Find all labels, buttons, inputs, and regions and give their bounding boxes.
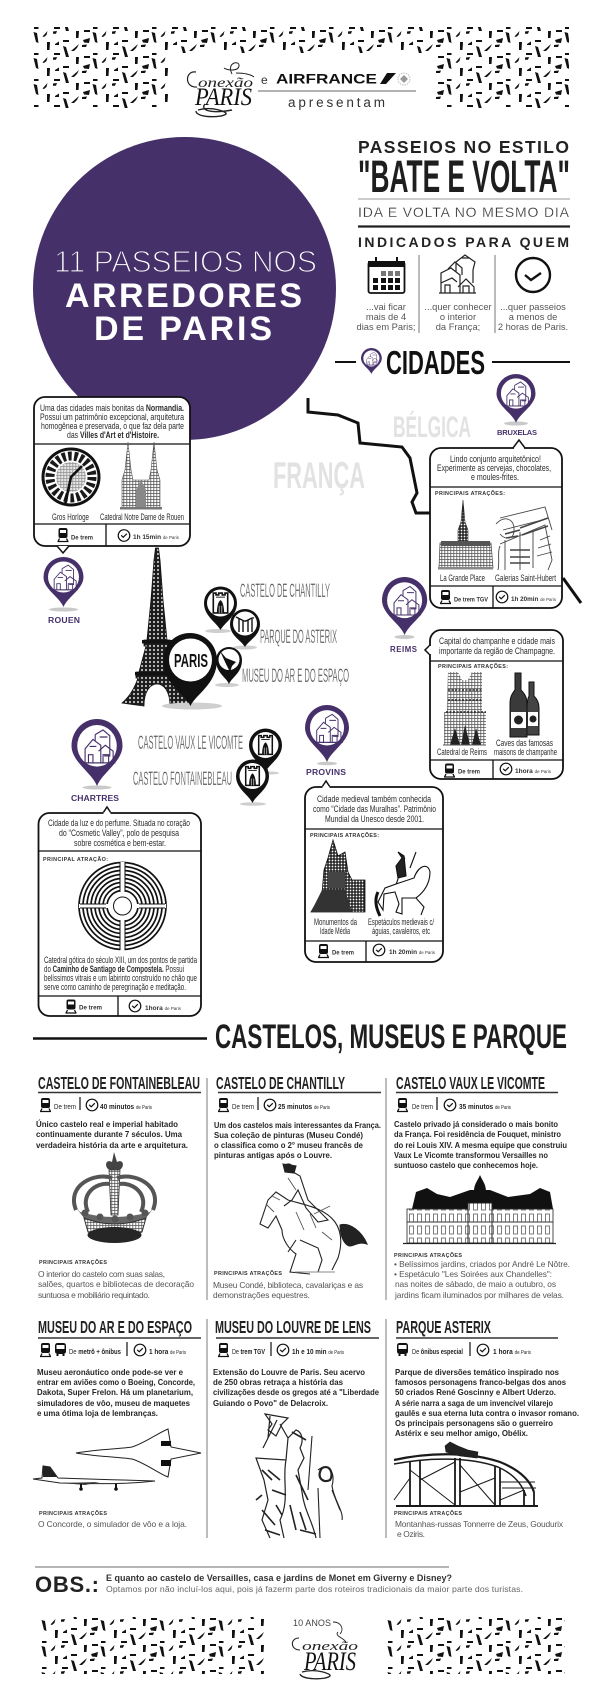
Chartres attraction text: belíssimos vitrais e um labirinto construído no chão que xyxy=(44,973,197,983)
attractions: e Oziris. xyxy=(397,1529,425,1539)
attractions: PRINCIPAIS ATRAÇÕES xyxy=(39,1259,107,1266)
attractions: demonstrações equestres. xyxy=(213,1290,310,1300)
description: Guiando o Povo" de Delacroix. xyxy=(213,1398,328,1408)
Rouen description: Possui um patrimônio excepcional, arquitetura xyxy=(40,412,184,422)
meta row: 1h e 10 min de Paris xyxy=(292,1347,344,1356)
duration xyxy=(118,530,180,541)
attractions xyxy=(213,1270,363,1300)
duration: 1hora de Paris xyxy=(515,768,552,775)
description: Os principais personagens são o guerreiro xyxy=(395,1418,553,1428)
meta row: De metrô + ônibus xyxy=(69,1347,121,1356)
attractions: jardins ficam iluminados por milhares de velas. xyxy=(394,1290,564,1300)
description: Museu aeronáutico onde pode-se ver e xyxy=(37,1367,183,1377)
logo: 10 anos Conexão Paris xyxy=(292,1618,359,1679)
attractions: Museu Condé, biblioteca, cavalariças e as xyxy=(213,1280,363,1290)
text: who is it for xyxy=(357,255,568,333)
meta row: 35 minutos de Paris xyxy=(459,1102,511,1111)
pin: Air museum xyxy=(216,647,242,684)
note: OBS: E quanto ao castelo de Versailles, casa e jardins de Monet em Giverny e Disney? xyxy=(106,1573,452,1583)
Reims description: importante da região de Champagne. xyxy=(439,646,555,656)
description: Astérix e seu melhor amigo, Obélix. xyxy=(395,1428,528,1438)
map label: Bélgica: BÉLGICA xyxy=(393,410,471,444)
description: famosos personagens franco-belgas dos anos xyxy=(395,1377,566,1387)
card: Museu do Ar e do Espaço xyxy=(33,1317,201,1529)
duration xyxy=(373,944,436,956)
description: simuladores de vôo, museu de maquetes xyxy=(37,1398,190,1408)
attractions: PRINCIPAIS ATRAÇÕES xyxy=(394,1252,462,1259)
illustration: Liberty Leading the People xyxy=(256,1414,342,1538)
transport: train xyxy=(444,764,480,777)
meta row: De trem xyxy=(54,1102,76,1111)
meta row xyxy=(40,1097,152,1112)
description xyxy=(36,1118,188,1150)
Provins description: como “Cidade das Muralhas”. Patrimônio xyxy=(313,804,436,814)
pin: Asterix xyxy=(230,609,260,647)
attractions: Montanhas-russas Tonnerre de Zeus, Goudurix xyxy=(395,1519,564,1529)
description xyxy=(394,1119,567,1170)
meta row xyxy=(397,1097,511,1112)
Chartres description: sobre cosmética e bem-estar. xyxy=(74,838,166,848)
panel: Provins: águias, cavaleiros, etc xyxy=(372,926,430,936)
description: da França. Foi residência de Fouquet, ministro xyxy=(394,1129,561,1139)
panel: Rouen: Gros Horloge xyxy=(52,512,89,522)
duration: 1h 20min de Paris xyxy=(511,596,557,603)
Chartres description: Cidade da luz e do perfume. Situada no coração xyxy=(48,818,190,828)
map: border line xyxy=(308,398,581,603)
text: who is it for: da França; xyxy=(436,322,480,332)
Chartres attraction text: Catedral gótica do século XIII, um dos pontos de partida xyxy=(44,955,197,965)
illustration: horse and rider xyxy=(260,1164,367,1274)
panel: Provins: Espetáculos medievais c/ xyxy=(368,917,434,927)
panel: Reims xyxy=(425,630,563,779)
panel: Bruxelas: La Grande Place xyxy=(440,573,485,583)
description: verdadeira história da arte e arquitetura. xyxy=(36,1140,188,1150)
text: MUSEU DO AR E DO ESPAÇO xyxy=(242,666,349,687)
duration xyxy=(496,591,557,603)
meta row: 25 minutos de Paris xyxy=(278,1102,330,1111)
Bruxelas description: e moules-frites. xyxy=(471,472,519,482)
transport: train: De trem xyxy=(458,768,480,776)
meta row: 1 hora de Paris xyxy=(149,1347,186,1356)
card: Parque Asterix: PARQUE ASTERIX xyxy=(396,1317,491,1337)
description: suntuoso castelo que conhecemos hoje. xyxy=(394,1160,538,1170)
duration: 1hora de Paris xyxy=(145,1005,182,1012)
description xyxy=(37,1367,195,1418)
panel: Chartres xyxy=(38,807,201,1016)
description: Vaux Le Vicomte transformou Versailles no xyxy=(394,1150,548,1160)
title line 2: ARREDORES xyxy=(65,277,302,315)
illustration: knight on horse xyxy=(376,852,430,916)
card: Castelo de Chantilly xyxy=(213,1073,381,1300)
text: who is it for: 2 horas de Paris. xyxy=(498,322,568,332)
attractions xyxy=(394,1252,570,1300)
panel: Bruxelas: PRINCIPAIS ATRAÇÕES: xyxy=(435,490,505,497)
transport: train xyxy=(318,944,354,958)
text: who is it for: o interior xyxy=(440,312,476,322)
description: Um dos castelos mais interessantes da França. xyxy=(214,1120,381,1130)
text: CASTELO VAUX LE VICOMTE xyxy=(138,733,243,754)
panel: Provins: Idade Média xyxy=(320,926,350,936)
meta row xyxy=(218,1342,344,1356)
text: who is it for: ...vai ficar xyxy=(366,302,406,312)
logo: 10 anos Conexão Paris: onexão xyxy=(302,1638,359,1653)
meta row: De ônibus especial xyxy=(412,1347,463,1356)
duration: 1h 20min de Paris xyxy=(389,949,436,956)
title line 1: 11 PASSEIOS NOS xyxy=(54,244,317,279)
transport: train xyxy=(58,528,93,542)
purple circle title xyxy=(33,137,336,440)
attractions: O Concorde, o simulador de vôo e a loja. xyxy=(38,1519,187,1529)
description: Parque de diversões temático inspirado nos xyxy=(395,1367,559,1377)
panel: Rouen: Catedral Notre Dame de Rouen xyxy=(100,512,184,522)
transport: train: De trem xyxy=(79,1004,102,1012)
text: CASTELO FONTAINEBLEAU xyxy=(133,769,232,790)
Chartres description xyxy=(48,818,190,848)
illustration: labyrinth xyxy=(79,862,166,951)
pin: Rouen xyxy=(44,557,84,625)
description: Sua coleção de pinturas (Museu Condé) xyxy=(214,1130,363,1140)
description: o classifica como o 2° museu francês de xyxy=(214,1140,363,1150)
meta row: 1 hora de Paris xyxy=(493,1347,531,1356)
illustration: Reims cathedral xyxy=(443,672,486,745)
panel: Provins xyxy=(305,781,443,962)
icon: village houses xyxy=(439,255,476,293)
map label: França: FRANÇA xyxy=(273,455,365,496)
panel: Reims: Caves das famosas xyxy=(496,738,553,748)
attractions xyxy=(394,1510,564,1539)
panel: Bruxelas: Galerias Saint-Hubert xyxy=(495,573,556,583)
heading: bate e volta: PASSEIOS NO ESTILO xyxy=(358,137,569,157)
panel: Reims: Catedral de Reims xyxy=(437,747,487,757)
pin: Reims: REIMS xyxy=(390,645,417,654)
heading: bate e volta xyxy=(358,137,570,250)
attractions: suntuosa e mobiliário requintado. xyxy=(38,1290,150,1300)
description: gaulês e sua eterna luta contra o invasor romano. xyxy=(395,1408,579,1418)
pin: Rouen: ROUEN xyxy=(48,615,80,625)
column dividers xyxy=(207,1078,386,1538)
description xyxy=(213,1367,379,1408)
duration: 1h 15min de Paris xyxy=(133,534,180,541)
illustration: champagne bottles xyxy=(510,673,539,737)
text: who is it for: ...quer passeios xyxy=(500,302,566,312)
meta row: De trem TGV xyxy=(232,1347,265,1356)
transport: train xyxy=(66,1000,102,1013)
text: PARQUE DO ASTERIX xyxy=(260,627,337,648)
Rouen description xyxy=(40,403,184,440)
Bruxelas description: Lindo conjunto arquitetônico! xyxy=(450,454,541,464)
transport: train: De trem xyxy=(71,534,93,542)
duration xyxy=(500,763,552,775)
Reims description: Capital do champanhe e cidade mais xyxy=(439,636,555,646)
attractions: nas noites de sábado, de maio a outubro, os xyxy=(395,1279,556,1289)
card: Museu do Louvre de Lens xyxy=(213,1317,379,1538)
Chartres attraction text: serve como caminho de peregrinação e meditação. xyxy=(44,982,186,992)
illustration: Rouen cathedral xyxy=(120,442,162,510)
text: apresentam: apresentam xyxy=(288,95,385,110)
text: who is it for: a menos de xyxy=(509,312,557,322)
pin: Chartres xyxy=(71,719,122,803)
attractions xyxy=(38,1259,194,1300)
meta row: De trem xyxy=(232,1102,254,1111)
pin: Bruxelas: BRUXELAS xyxy=(497,428,537,437)
attractions: • Espetáculo "Les Soirées aux Chandelles": xyxy=(394,1269,552,1279)
pin: Provins: PROVINS xyxy=(306,767,346,777)
Rouen description: homogênea e preservada, o que faz dela parte xyxy=(41,421,184,431)
meta row xyxy=(397,1342,531,1356)
pin: Provins xyxy=(305,705,349,777)
note: OBS xyxy=(35,1567,523,1597)
description: pinturas antigas após o Louvre. xyxy=(214,1150,332,1160)
description: Dakota, Super Frelon. Há um planetarium, xyxy=(37,1387,193,1397)
attractions: • Belíssimos jardins, criados por André Le Nôtre. xyxy=(394,1259,570,1269)
pin: Vaux le Vicomte xyxy=(249,728,282,774)
heading: cidades: CIDADES xyxy=(386,344,485,381)
attractions: PRINCIPAIS ATRAÇÕES xyxy=(394,1510,462,1517)
pin: Paris: PARIS xyxy=(174,651,208,671)
pin: Chartres: CHARTRES xyxy=(71,793,119,803)
meta row: 40 minutos de Paris xyxy=(100,1102,152,1111)
logo: Conexão Paris: onexão xyxy=(198,76,253,91)
text: who is it for: mais de 4 xyxy=(366,312,406,322)
panel: Rouen xyxy=(34,397,190,553)
attractions: PRINCIPAIS ATRAÇÕES xyxy=(39,1510,107,1517)
description: 50 criados René Goscinny e Albert Uderzo. xyxy=(395,1387,556,1397)
description xyxy=(395,1367,579,1438)
description: entrar em aviões como o Boeing, Concorde, xyxy=(37,1377,195,1387)
description: civilizações desde os gregos até a "Liberdade xyxy=(213,1387,379,1397)
meta row: De trem xyxy=(412,1102,433,1111)
Bruxelas description: Experimente as cervejas, chocolates, xyxy=(437,463,551,473)
header pattern band xyxy=(33,27,569,108)
pins: Paris attractions xyxy=(162,586,260,710)
heading: bate e volta: IDA E VOLTA NO MESMO DIA xyxy=(358,204,570,220)
logo: Air France xyxy=(261,70,410,87)
card: Museu do Ar e do Espaço: MUSEU DO AR E DO ESPAÇO xyxy=(38,1317,192,1337)
transport: TGV xyxy=(440,590,489,604)
illustration: roller coaster xyxy=(394,1442,538,1506)
card: Castelo de Chantilly: CASTELO DE CHANTILLY xyxy=(216,1073,345,1093)
logo: Air France: e xyxy=(261,73,268,87)
attractions: salões, quartos e bibliotecas de decoração xyxy=(38,1279,194,1289)
note: OBS: Optamos por não incluí-los aqui, pois já fazerm parte dos roteiros tradicionais da maior parte dos turistas. xyxy=(106,1584,523,1594)
duration xyxy=(129,1000,182,1012)
logo: Conexão Paris: PARIS xyxy=(194,84,252,111)
illustration: medieval castle xyxy=(311,840,365,912)
description: Único castelo real e imperial habitado xyxy=(36,1118,178,1129)
description: e uma ótima loja de lembranças. xyxy=(37,1408,158,1418)
Rouen description: das Villes d'Art et d'Histoire. xyxy=(67,430,159,440)
heading: bate e volta: INDICADOS PARA QUEM xyxy=(358,234,569,250)
illustration: Gros Horloge clock xyxy=(42,448,100,506)
attractions: PRINCIPAIS ATRAÇÕES xyxy=(214,1270,282,1277)
panel: Provins: PRINCIPAIS ATRAÇÕES: xyxy=(310,832,379,839)
Provins description: Mundial da Unesco desde 2001. xyxy=(325,814,424,824)
description: continuamente durante 7 séculos. Uma xyxy=(36,1129,182,1139)
transport: TGV: De trem TGV xyxy=(454,596,489,604)
pin: Chantilly xyxy=(204,586,237,630)
transport: train: De trem xyxy=(332,950,354,956)
footer pattern right xyxy=(387,1617,565,1674)
card: Parque Asterix xyxy=(394,1317,579,1539)
logo: Conexão Paris xyxy=(188,63,254,117)
pin: Fontainebleau xyxy=(236,759,269,806)
logo: Air France: AIRFRANCE xyxy=(276,70,377,86)
panel: Provins: Monumentos da xyxy=(314,917,357,927)
illustration: Galerias Saint-Hubert xyxy=(496,507,552,570)
description: Extensão do Louvre de Paris. Seu acervo xyxy=(213,1367,365,1377)
title line 3: DE PARIS xyxy=(94,310,272,348)
Provins description: Cidade medieval também conhecida xyxy=(317,794,431,804)
logo: 10 anos Conexão Paris: PARIS xyxy=(303,1647,356,1676)
note: OBS: OBS.: xyxy=(35,1572,99,1597)
illustration: Concorde xyxy=(33,1429,201,1491)
illustration: Vaux le Vicomte castle xyxy=(403,1175,556,1244)
attractions xyxy=(38,1510,187,1529)
icon: clock xyxy=(516,258,550,292)
pin: Bruxelas xyxy=(496,374,537,437)
logo: 10 anos Conexão Paris: 10 ANOS xyxy=(293,1618,331,1628)
panel: Bruxelas xyxy=(430,440,562,608)
Provins description xyxy=(313,794,436,824)
description: A série narra a saga de um invencível vilarejo xyxy=(395,1398,553,1408)
text: who is it for: dias em Paris; xyxy=(357,322,415,332)
description: de 250 obras retraça a história das xyxy=(213,1377,343,1387)
panel: Reims: maisons de champanhe xyxy=(494,747,557,757)
card: Museu do Louvre de Lens: MUSEU DO LOUVRE DE LENS xyxy=(215,1317,371,1337)
Rouen description: Uma das cidades mais bonitas da Normandia. xyxy=(40,403,184,413)
heading: cidades xyxy=(335,344,570,381)
Bruxelas description xyxy=(437,454,551,482)
pin: Reims xyxy=(382,577,427,654)
Chartres attraction text xyxy=(44,955,197,992)
card: Castelo de Fontainebleau: CASTELO DE FONTAINEBLEAU xyxy=(38,1073,200,1093)
meta row xyxy=(218,1097,330,1112)
text: who is it for: ...quer conhecer xyxy=(424,302,492,312)
description: do rei Louis XIV. A mesma equipe que construiu xyxy=(394,1140,567,1150)
description xyxy=(214,1120,381,1160)
attractions: O interior do castelo com suas salas, xyxy=(38,1269,165,1279)
Chartres attraction text: do Caminho de Santiago de Compostela. Possui xyxy=(44,964,184,974)
illustration: La Grande Place xyxy=(438,500,493,570)
meta row xyxy=(40,1342,186,1356)
Reims description xyxy=(439,636,555,656)
description: Castelo privado já considerado o mais bonito xyxy=(394,1119,558,1129)
footer pattern left xyxy=(40,1617,265,1674)
card: Castelo Vaux le Vicomte xyxy=(394,1073,570,1300)
text: CASTELO DE CHANTILLY xyxy=(240,581,330,602)
icon: calendar xyxy=(368,257,405,293)
illustration: crown xyxy=(74,1152,156,1243)
icon: Eiffel tower xyxy=(122,548,192,706)
panel: Reims: PRINCIPAIS ATRAÇÕES: xyxy=(438,663,508,670)
card: Castelo de Fontainebleau xyxy=(36,1073,201,1300)
Chartres description: do “Cosmetic Valley”, polo de pesquisa xyxy=(59,828,179,838)
panel: Chartres: PRINCIPAL ATRAÇÃO: xyxy=(43,856,108,863)
